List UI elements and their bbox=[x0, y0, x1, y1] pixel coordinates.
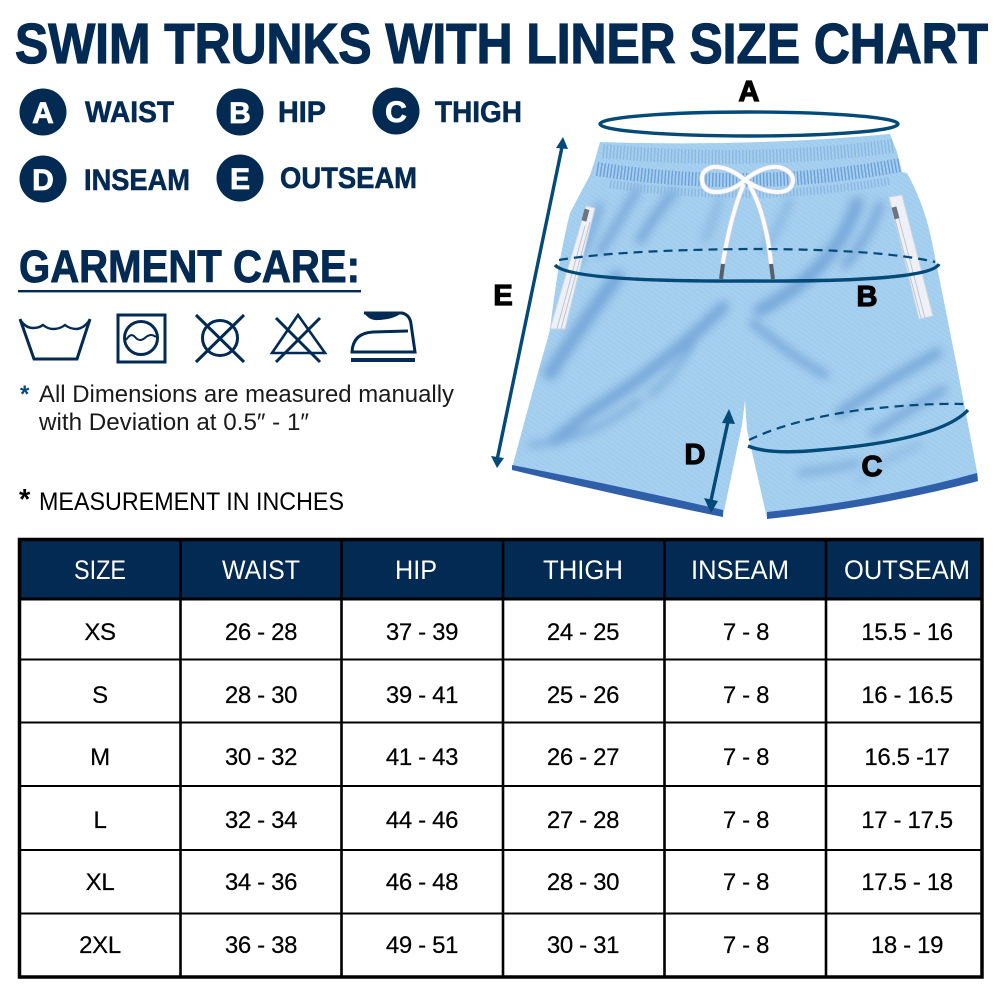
row XS: 24 - 25 bbox=[547, 619, 619, 646]
table header row: WAIST bbox=[222, 555, 300, 585]
legend item: B hip: HIP bbox=[278, 96, 326, 129]
row M bbox=[90, 744, 950, 771]
table header row bbox=[74, 555, 970, 585]
icon: do not bleach bbox=[272, 315, 325, 362]
row S: 39 - 41 bbox=[386, 682, 458, 709]
row M: 26 - 27 bbox=[547, 744, 619, 771]
row L: 7 - 8 bbox=[723, 807, 769, 834]
row 2XL: 30 - 31 bbox=[547, 932, 619, 959]
row 2XL bbox=[79, 932, 943, 959]
legend item: C thigh bbox=[372, 88, 522, 134]
note: dimensions: All Dimensions are measured manually bbox=[39, 381, 454, 408]
row 2XL: 7 - 8 bbox=[723, 932, 769, 959]
row XS: 15.5 - 16 bbox=[861, 619, 953, 646]
heading: garment care: GARMENT CARE: bbox=[19, 241, 360, 292]
arrow D: inseam bbox=[704, 409, 735, 513]
legend item: A waist: A bbox=[32, 97, 54, 130]
size table bbox=[19, 539, 982, 977]
table header row: INSEAM bbox=[691, 555, 789, 585]
arrow E: outseam bbox=[491, 137, 568, 468]
row XS: 26 - 28 bbox=[225, 619, 297, 646]
legend item: C thigh: C bbox=[385, 96, 407, 129]
table header row: OUTSEAM bbox=[844, 555, 970, 585]
row XS: 7 - 8 bbox=[723, 619, 769, 646]
measure B: hip ellipse bbox=[555, 249, 939, 281]
row XL: 7 - 8 bbox=[723, 869, 769, 896]
label B: B bbox=[857, 281, 877, 313]
measure A: waist ellipse bbox=[600, 112, 898, 136]
row L bbox=[94, 807, 953, 834]
legend item: B hip bbox=[216, 88, 326, 136]
row S: 7 - 8 bbox=[723, 682, 769, 709]
row XL: 46 - 48 bbox=[386, 869, 458, 896]
row XS: XS bbox=[84, 619, 116, 646]
measure C: thigh ellipse bbox=[748, 404, 968, 452]
row XL bbox=[86, 869, 953, 896]
row XS: 37 - 39 bbox=[386, 619, 458, 646]
legend item: D inseam bbox=[20, 156, 190, 202]
right pocket zipper bbox=[889, 195, 933, 319]
row S bbox=[92, 682, 953, 709]
row 2XL: 18 - 19 bbox=[871, 932, 943, 959]
row M: 7 - 8 bbox=[723, 744, 769, 771]
table header background bbox=[19, 540, 982, 599]
row M: 16.5 -17 bbox=[864, 744, 950, 771]
note: dimensions bbox=[20, 381, 454, 436]
table header row: THIGH bbox=[543, 555, 623, 585]
drawstring bbox=[702, 167, 793, 263]
row XL: 17.5 - 18 bbox=[861, 869, 953, 896]
label D: D bbox=[685, 439, 705, 471]
legend item: E outseam: E bbox=[230, 163, 250, 196]
note: dimensions: with Deviation at 0.5″ - 1″ bbox=[38, 409, 309, 436]
label C: C bbox=[862, 451, 883, 483]
label E: E bbox=[493, 280, 513, 312]
table header row: HIP bbox=[395, 555, 437, 585]
row XL: XL bbox=[86, 869, 114, 896]
drawstring tips bbox=[721, 264, 773, 279]
row 2XL: 36 - 38 bbox=[225, 932, 297, 959]
waistband gathers bbox=[597, 146, 900, 194]
legend item: D inseam: D bbox=[32, 164, 54, 197]
legend item: A waist: WAIST bbox=[85, 96, 174, 129]
row L: 17 - 17.5 bbox=[861, 807, 953, 834]
row 2XL: 49 - 51 bbox=[386, 932, 458, 959]
row 2XL: 2XL bbox=[79, 932, 121, 959]
left pocket zipper bbox=[550, 206, 595, 329]
row XS bbox=[84, 619, 953, 646]
row S: S bbox=[92, 682, 108, 709]
icon: iron bbox=[351, 313, 415, 362]
right hem shadow bbox=[767, 473, 978, 519]
fabric folds bbox=[516, 134, 972, 502]
icon: wash tub bbox=[20, 319, 90, 359]
shorts body bbox=[512, 134, 978, 518]
table header row: SIZE bbox=[74, 555, 126, 585]
row M: 30 - 32 bbox=[225, 744, 297, 771]
row S: 16 - 16.5 bbox=[861, 682, 953, 709]
row L: 44 - 46 bbox=[386, 807, 458, 834]
legend item: C thigh: THIGH bbox=[435, 96, 522, 129]
row M: M bbox=[90, 744, 110, 771]
legend item: A waist bbox=[20, 88, 174, 136]
left hem shadow bbox=[512, 465, 723, 517]
icon: do not dry clean bbox=[196, 315, 244, 362]
mesh texture bbox=[516, 134, 972, 502]
table grid bbox=[19, 539, 982, 977]
shorts illustration bbox=[500, 130, 990, 530]
note: dimensions: * bbox=[20, 381, 30, 408]
note: measurement in inches: MEASUREMENT IN INCHES bbox=[39, 488, 344, 516]
legend item: B hip: B bbox=[229, 97, 251, 130]
legend item: E outseam: OUTSEAM bbox=[280, 162, 417, 195]
row M: 41 - 43 bbox=[386, 744, 458, 771]
legend: measurement keys bbox=[20, 88, 522, 202]
row L: 32 - 34 bbox=[225, 807, 297, 834]
row XL: 34 - 36 bbox=[225, 869, 297, 896]
row L: 27 - 28 bbox=[547, 807, 619, 834]
row XL: 28 - 30 bbox=[547, 869, 619, 896]
legend item: D inseam: INSEAM bbox=[84, 164, 190, 197]
row S: 28 - 30 bbox=[225, 682, 297, 709]
row S: 25 - 26 bbox=[547, 682, 619, 709]
icon: tumble dry square bbox=[118, 315, 165, 362]
row L: L bbox=[94, 807, 106, 834]
note: measurement in inches: * bbox=[19, 484, 31, 516]
label A: A bbox=[739, 76, 760, 108]
care icons bbox=[20, 313, 415, 362]
legend item: E outseam bbox=[216, 154, 417, 202]
